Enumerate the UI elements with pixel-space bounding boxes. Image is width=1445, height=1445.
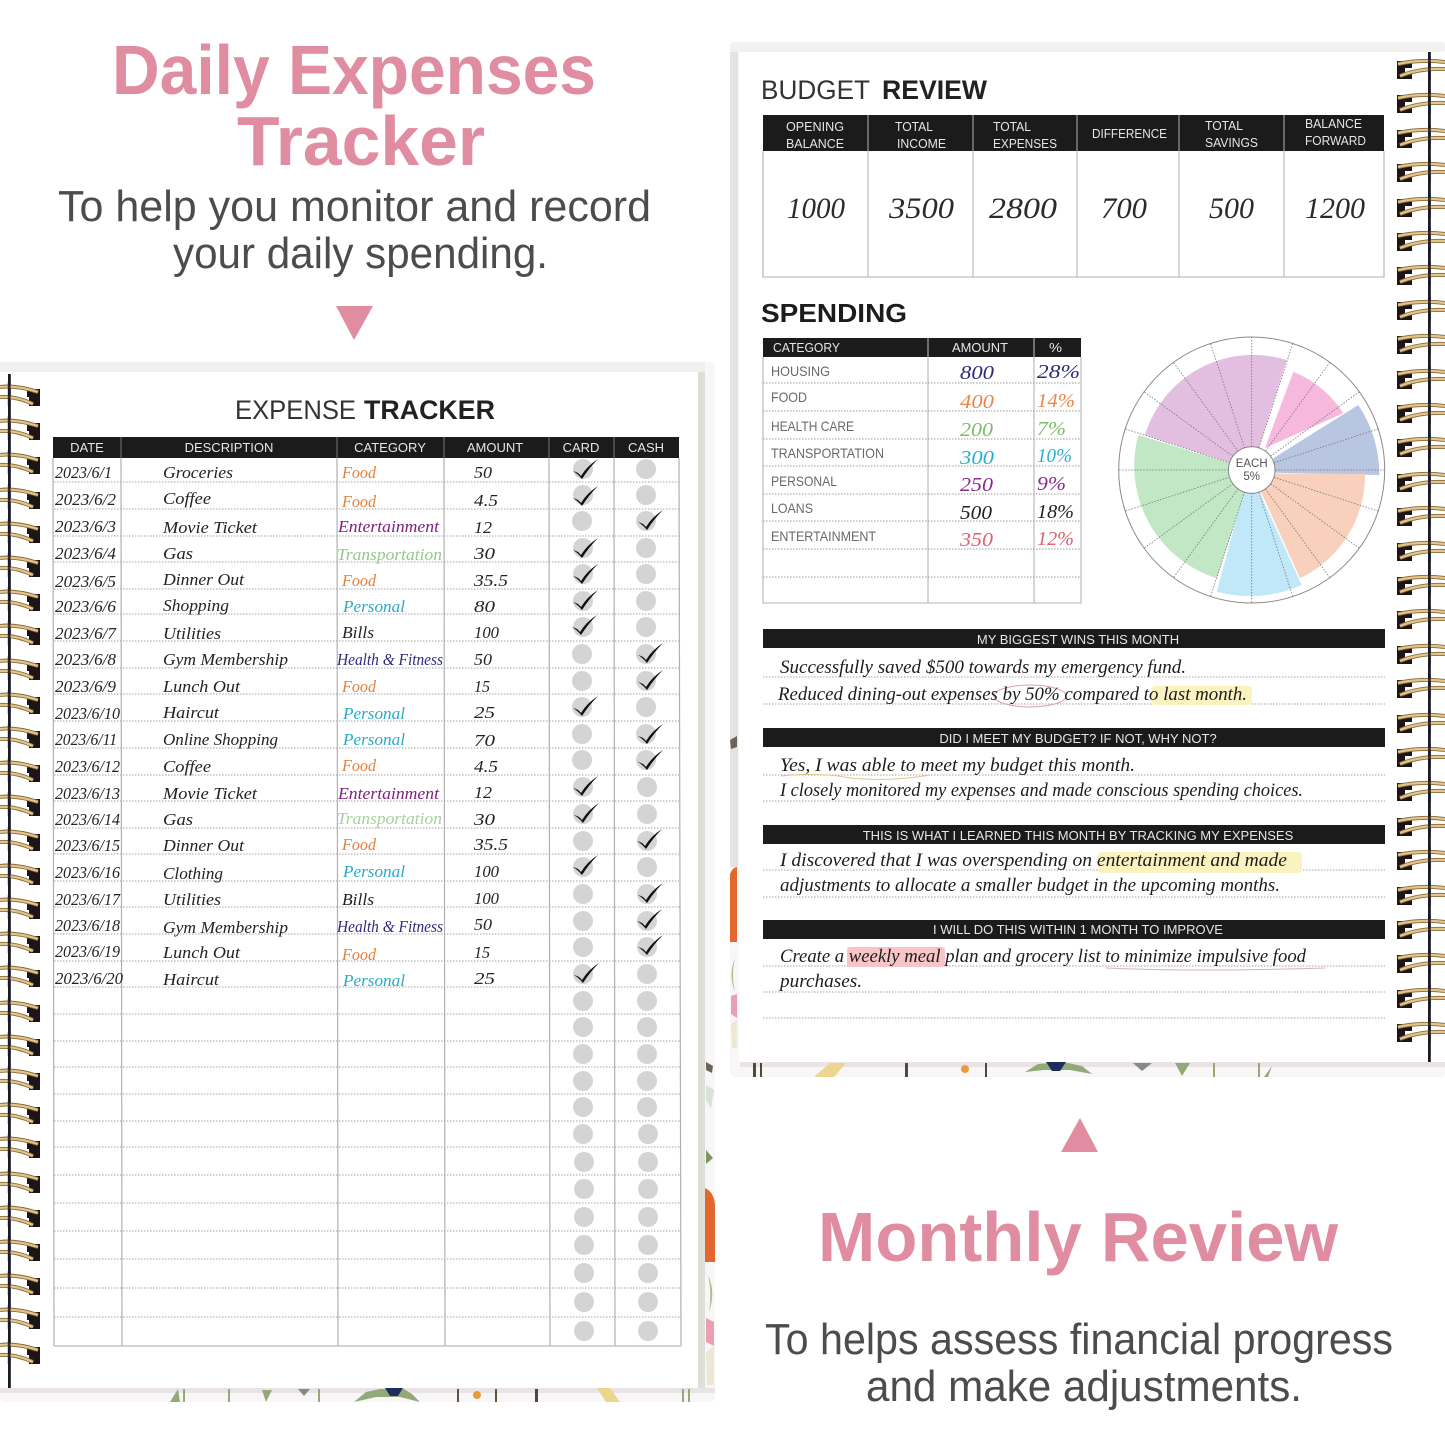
- row 17: [55, 889, 499, 909]
- spending percentages: 18%: [1037, 501, 1074, 523]
- title: expense tracker: [235, 395, 495, 425]
- row 18: [55, 915, 493, 937]
- section: what I learned: adjustments to allocate a smaller budget in the upcoming months.: [780, 875, 1280, 896]
- spending categories: HEALTH CARE: [771, 418, 854, 434]
- spending table: [763, 338, 1081, 603]
- row 13: 12: [474, 783, 493, 802]
- row 3: 12: [474, 518, 493, 537]
- spending amounts: 350: [959, 529, 993, 551]
- section: will do to improve: I WILL DO THIS WITHIN 1 MONTH TO IMPROVE: [933, 922, 1223, 937]
- row 2: Coffee: [163, 489, 211, 508]
- row 11: [55, 730, 496, 750]
- row 14: Transportation: [337, 809, 442, 828]
- spending categories: FOOD: [771, 389, 807, 405]
- budget column headers: TOTAL: [993, 119, 1031, 134]
- section: what I learned: [763, 825, 1385, 897]
- row 20: 25: [474, 969, 495, 988]
- row 10: 2023/6/10: [55, 704, 120, 723]
- heading: monthly review: Monthly Review: [818, 1198, 1339, 1276]
- spending amounts: [959, 362, 994, 551]
- expense table: [53, 437, 681, 1346]
- spending amounts: 400: [960, 391, 994, 413]
- notebook: expense tracker: [0, 362, 715, 1402]
- row 4: 2023/6/4: [55, 544, 116, 563]
- row 20: Personal: [342, 971, 405, 990]
- row 12: [55, 756, 498, 776]
- row 14: 2023/6/14: [55, 810, 120, 829]
- spending categories: TRANSPORTATION: [771, 445, 884, 461]
- row 8: Gym Membership: [163, 650, 288, 669]
- row 6: 2023/6/6: [55, 597, 116, 616]
- budget values: 500: [1209, 192, 1254, 225]
- row 16: Personal: [342, 862, 405, 881]
- table header: CASH: [628, 440, 664, 455]
- budget values: 1000: [787, 192, 845, 225]
- row 5: 2023/6/5: [55, 572, 116, 591]
- arrow: down to tracker: [336, 306, 373, 340]
- row 1: Groceries: [163, 463, 233, 482]
- row 7: 100: [474, 623, 499, 642]
- row 8: 50: [474, 650, 493, 669]
- row 3: [55, 517, 493, 537]
- section: what I learned: THIS IS WHAT I LEARNED THIS MONTH BY TRACKING MY EXPENSES: [863, 828, 1294, 843]
- heading: Daily Expenses Tracker: [112, 31, 596, 180]
- spending percentages: 9%: [1037, 473, 1066, 495]
- row 7: 2023/6/7: [55, 624, 118, 643]
- budget values: 3500: [888, 192, 954, 225]
- row 5: Food: [341, 571, 376, 590]
- spending categories: [771, 363, 884, 544]
- row 20: [55, 969, 495, 990]
- check marks: [572, 459, 663, 983]
- title: budget review: BUDGET: [761, 75, 870, 105]
- heading: spending: SPENDING: [761, 298, 907, 328]
- row 18: 50: [474, 915, 493, 934]
- row 17: 2023/6/17: [55, 890, 121, 909]
- row 19: Lunch Out: [162, 943, 241, 962]
- segment: personal: [1265, 372, 1343, 448]
- table header: [53, 437, 679, 458]
- spending amounts: 800: [960, 362, 994, 384]
- row 2: 4.5: [474, 491, 498, 510]
- spending percentages: 12%: [1037, 528, 1074, 550]
- row 16: [55, 862, 499, 883]
- spending categories: ENTERTAINMENT: [771, 528, 876, 544]
- table header: CATEGORY: [354, 440, 426, 455]
- section: biggest wins: MY BIGGEST WINS THIS MONTH: [977, 632, 1179, 647]
- row 6: 80: [474, 597, 496, 616]
- spending wheel chart: [1119, 337, 1385, 603]
- row 14: 30: [473, 810, 496, 829]
- section: biggest wins: [763, 629, 1385, 707]
- row 5: 35.5: [473, 571, 508, 590]
- title: expense tracker: EXPENSE: [235, 395, 356, 425]
- spending header labels: AMOUNT: [952, 340, 1008, 355]
- budget values: 700: [1101, 192, 1147, 225]
- spending percentages: 14%: [1037, 390, 1075, 412]
- spending categories: HOUSING: [771, 363, 830, 379]
- section: did I meet my budget: [763, 728, 1385, 801]
- budget values: 1200: [1305, 192, 1365, 225]
- row 10: Haircut: [162, 703, 220, 722]
- row 19: 2023/6/19: [55, 942, 120, 961]
- row 11: 70: [474, 731, 496, 750]
- segment: food: [1261, 474, 1365, 578]
- segment: loans: [1217, 493, 1302, 596]
- row 15: 35.5: [473, 835, 508, 854]
- budget column headers: OPENING: [786, 119, 844, 134]
- section: did I meet my budget: I closely monitored my expenses and made conscious spending choices.: [779, 780, 1303, 801]
- budget column headers: FORWARD: [1305, 133, 1366, 148]
- budget values: [787, 192, 1365, 225]
- row 10: 25: [474, 703, 495, 722]
- spending header labels: CATEGORY: [773, 340, 840, 355]
- spending amounts: 500: [960, 502, 992, 524]
- row 4: Transportation: [337, 545, 442, 564]
- budget column headers: EXPENSES: [993, 136, 1057, 151]
- section: biggest wins: Successfully saved $500 towards my emergency fund.: [780, 657, 1186, 678]
- row 7: [55, 623, 499, 643]
- row 20: Haircut: [162, 970, 220, 989]
- section: what I learned: I discovered that I was overspending on entertainment and made: [779, 850, 1287, 871]
- page sheet: [739, 52, 1445, 1062]
- row 11: Online Shopping: [163, 730, 278, 749]
- spending amounts: 200: [960, 419, 993, 441]
- title: budget review: [761, 75, 988, 105]
- heading: Daily Expenses Tracker: Tracker: [237, 102, 485, 180]
- budget column headers: TOTAL: [895, 119, 933, 134]
- row 12: Food: [341, 756, 376, 775]
- row 17: 100: [474, 889, 499, 908]
- wheel center: each 5%: EACH: [1236, 458, 1268, 470]
- row 14: Gas: [163, 810, 193, 829]
- row 1: [55, 463, 493, 482]
- row 1: 50: [474, 463, 493, 482]
- table header: DESCRIPTION: [185, 440, 273, 455]
- row 12: Coffee: [163, 757, 211, 776]
- section: will do to improve: purchases.: [778, 971, 862, 992]
- row 16: 2023/6/16: [55, 863, 120, 882]
- row 8: [55, 650, 493, 669]
- title: expense tracker: TRACKER: [364, 395, 495, 425]
- spending header labels: [773, 340, 1062, 355]
- row 15: [55, 835, 508, 855]
- row 15: Dinner Out: [162, 836, 245, 855]
- row 12: 4.5: [474, 757, 498, 776]
- row 7: Utilities: [163, 624, 221, 643]
- spending percentages: [1037, 361, 1080, 550]
- row 18: Gym Membership: [163, 918, 288, 937]
- wheel spokes: [1119, 337, 1385, 603]
- budget column headers: BALANCE: [786, 136, 844, 151]
- row 3: 2023/6/3: [55, 517, 116, 536]
- budget column headers: SAVINGS: [1205, 135, 1258, 150]
- row 19: Food: [341, 945, 376, 964]
- subtitle: assess progress: [765, 1315, 1393, 1411]
- row 18: 2023/6/18: [55, 916, 120, 935]
- row 2: Food: [341, 492, 376, 511]
- row 9: 15: [474, 677, 490, 696]
- row 4: [55, 544, 496, 564]
- row 8: 2023/6/8: [55, 650, 116, 669]
- row 9: 2023/6/9: [55, 677, 116, 696]
- row 19: [55, 942, 490, 964]
- section: will do to improve: Create a weekly meal plan and grocery list to minimize impulsive food: [780, 946, 1306, 967]
- page sheet: [0, 372, 698, 1388]
- row 20: 2023/6/20: [55, 969, 123, 988]
- row 19: 15: [474, 943, 490, 962]
- row 12: 2023/6/12: [55, 757, 120, 776]
- subtitle: monitor spending: [58, 182, 651, 278]
- budget column headers: BALANCE: [1305, 116, 1362, 131]
- row 9: Lunch Out: [162, 677, 241, 696]
- budget summary table: [763, 115, 1384, 277]
- budget values: 2800: [989, 192, 1057, 225]
- spiral spine: [1397, 52, 1445, 1062]
- row 17: Utilities: [163, 890, 221, 909]
- budget column headers: DIFFERENCE: [1092, 126, 1167, 141]
- row 2: 2023/6/2: [55, 490, 116, 509]
- subtitle: assess progress: and make adjustments.: [866, 1362, 1302, 1411]
- section: biggest wins: Reduced dining-out expenses by 50% compared to last month.: [777, 684, 1247, 705]
- segment: transportation: [1273, 405, 1379, 475]
- spending percentages: 7%: [1037, 418, 1066, 440]
- check circles: [572, 459, 658, 1341]
- table grid: [53, 458, 681, 1346]
- subtitle: assess progress: To helps assess financial progress: [765, 1315, 1393, 1364]
- heading: Daily Expenses Tracker: Daily Expenses: [112, 31, 596, 109]
- notebook cover with floral edge: [0, 362, 715, 1402]
- table header: DATE: [70, 440, 104, 455]
- section: did I meet my budget: Yes, I was able to meet my budget this month.: [780, 755, 1135, 776]
- spending percentages: 10%: [1037, 445, 1072, 467]
- budget column headers: INCOME: [897, 136, 946, 151]
- row 13: [55, 783, 493, 803]
- row 14: [55, 809, 496, 829]
- row 10: [55, 703, 495, 723]
- budget column headers: TOTAL: [1205, 118, 1243, 133]
- row 3: Movie Ticket: [162, 518, 258, 537]
- table header: CARD: [563, 440, 599, 455]
- spending categories: PERSONAL: [771, 473, 837, 489]
- row 3: Entertainment: [337, 517, 440, 536]
- row 7: Bills: [342, 623, 374, 642]
- subtitle: monitor spending: your daily spending.: [173, 229, 548, 278]
- row 4: 30: [473, 544, 496, 563]
- row 6: Shopping: [163, 596, 229, 615]
- spending header labels: %: [1049, 340, 1062, 355]
- segment: entertainment: [1134, 435, 1252, 578]
- row 17: Bills: [342, 890, 374, 909]
- budget column headers: [786, 116, 1366, 151]
- row 15: 2023/6/15: [55, 836, 120, 855]
- subtitle: monitor spending: To help you monitor and record: [58, 182, 651, 231]
- row 5: [55, 570, 508, 591]
- row 1: 2023/6/1: [55, 463, 112, 482]
- row 2: [55, 489, 498, 511]
- row 13: 2023/6/13: [55, 784, 120, 803]
- segment: housing: [1145, 355, 1287, 470]
- spending percentages: 28%: [1037, 361, 1080, 383]
- row 16: 100: [474, 862, 499, 881]
- row 8: Health & Fitness: [336, 650, 443, 669]
- section: will do to improve: [763, 920, 1385, 1018]
- row 16: Clothing: [163, 864, 223, 883]
- row 18: Health & Fitness: [336, 917, 443, 936]
- row 11: Personal: [342, 730, 405, 749]
- row 5: Dinner Out: [162, 570, 245, 589]
- row 13: Entertainment: [337, 784, 440, 803]
- table header: AMOUNT: [467, 440, 523, 455]
- row 1: Food: [341, 463, 376, 482]
- row 9: Food: [341, 677, 376, 696]
- row 15: Food: [341, 835, 376, 854]
- row 10: Personal: [342, 704, 405, 723]
- spending categories: LOANS: [771, 500, 813, 516]
- row 11: 2023/6/11: [55, 730, 117, 749]
- title: budget review: REVIEW: [882, 75, 988, 105]
- row 13: Movie Ticket: [162, 784, 258, 803]
- row 6: Personal: [342, 597, 405, 616]
- wheel center: each 5%: [1228, 447, 1275, 493]
- row 4: Gas: [163, 544, 193, 563]
- section: did I meet my budget: DID I MEET MY BUDGET? IF NOT, WHY NOT?: [939, 731, 1217, 746]
- arrow: up to review: [1061, 1118, 1098, 1152]
- row 6: [55, 596, 496, 616]
- spending amounts: 250: [960, 474, 993, 496]
- spending amounts: 300: [959, 447, 994, 469]
- notebook cover with floral edge: [730, 42, 1445, 1077]
- row 9: [55, 677, 490, 696]
- notebook: monthly budget review: [730, 42, 1445, 1077]
- spiral spine: [0, 374, 40, 1388]
- wheel center: each 5%: 5%: [1243, 471, 1260, 483]
